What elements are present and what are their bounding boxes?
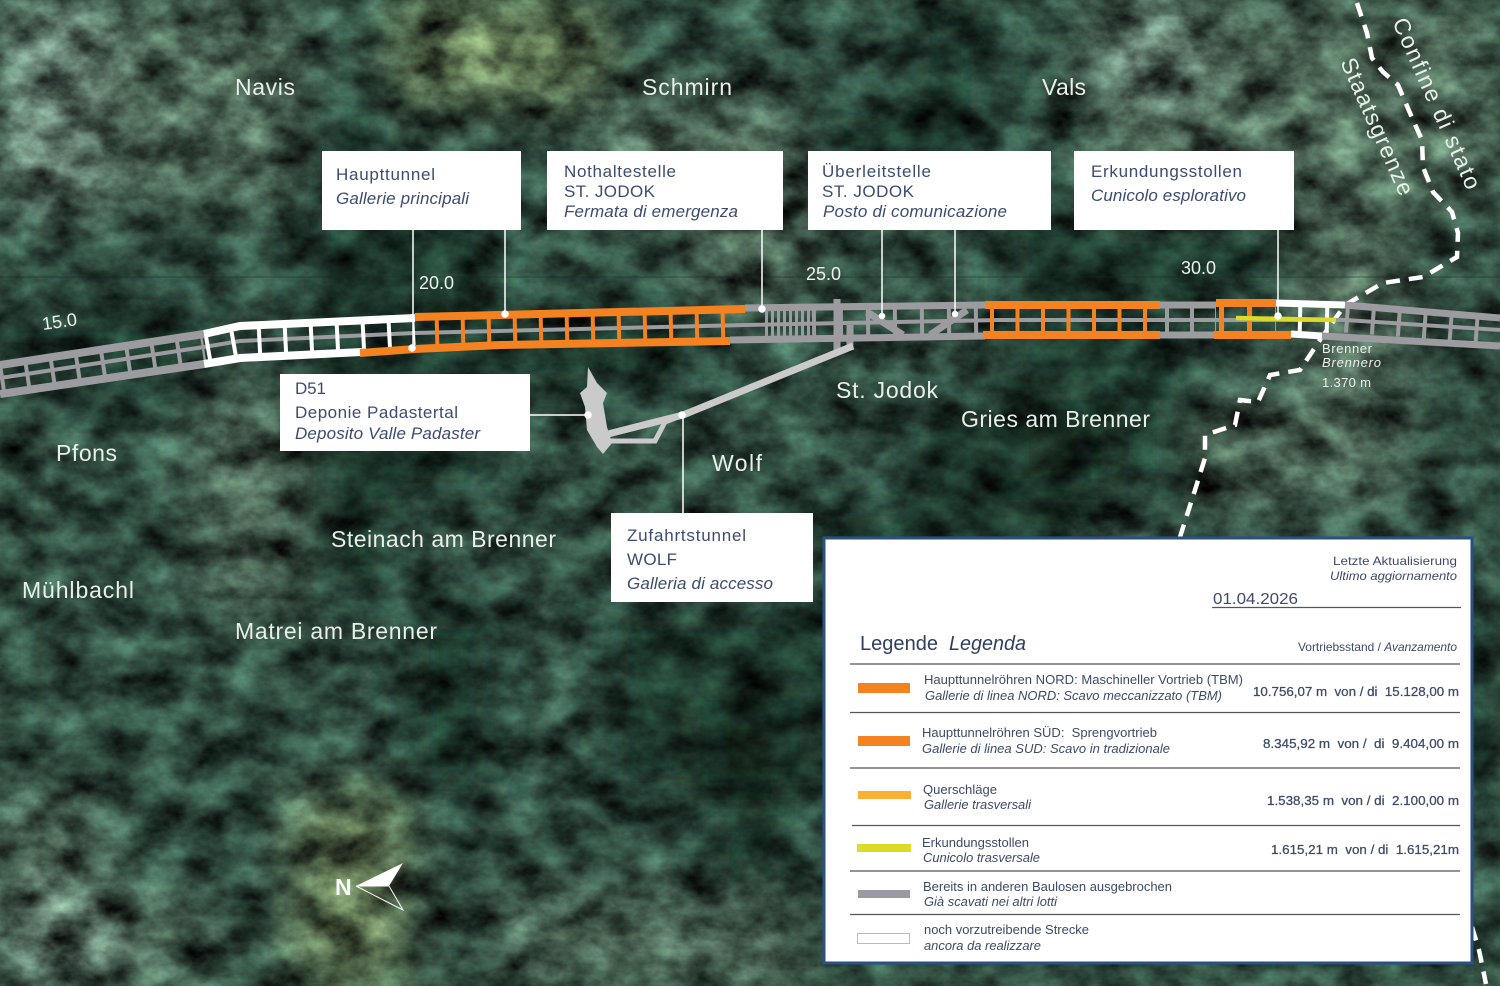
state border dashed line [1180, 3, 1486, 984]
kilometre labels [41, 258, 1216, 334]
place names: Wolf [712, 450, 763, 476]
callout: Zufahrtstunnel: Zufahrtstunnel [627, 526, 746, 545]
orange tubes east [1214, 303, 1291, 335]
tunnel alignment [0, 299, 1500, 394]
callout: D51: Deposito Valle Padaster [295, 424, 481, 443]
Brenner label: Brenner [1322, 341, 1373, 356]
grey tubes short [1160, 305, 1216, 335]
place names: Navis [235, 74, 295, 100]
legend row: already excavated: Bereits in anderen Baulosen ausgebrochen [923, 879, 1172, 894]
exploratory tunnel centre line [0, 320, 1500, 378]
legend row: already excavated: Già scavati nei altri lotti [924, 894, 1058, 909]
legend row: TBM north: Gallerie di linea NORD: Scavo meccanizzato (TBM) [925, 688, 1222, 703]
place names: Matrei am Brenner [235, 618, 437, 644]
cross passages grey west [0, 347, 204, 378]
legend row: exploratory tunnel: 1.615,21 m von / di 1.615,21m [1271, 842, 1459, 857]
kilometre labels: 25.0 [806, 264, 841, 284]
callout: Überleitstelle [808, 151, 1051, 230]
last update: Ultimo aggiornamento [1330, 569, 1457, 583]
legend row: TBM north: Haupttunnelröhren NORD: Maschineller Vortrieb (TBM) [924, 672, 1243, 687]
callout: Erkundungsstollen: Erkundungsstollen [1091, 162, 1242, 181]
cross passages white [206, 333, 415, 348]
cross passages orange main [435, 325, 745, 332]
legend row: cross passages: Gallerie trasversali [924, 797, 1032, 812]
callout: Überleitstelle: Posto di comunicazione [823, 202, 1007, 221]
callout: Erkundungsstollen: Cunicolo esplorativo [1091, 186, 1246, 205]
legend row: cross passages: 1.538,35 m von / di 2.100,00 m [1267, 793, 1459, 808]
orange tubes middle [983, 305, 1160, 335]
legend heading: Vortriebsstand / Avanzamento [1298, 640, 1457, 654]
legend row: already excavated [858, 879, 1172, 909]
legend row: still to excavate: ancora da realizzare [924, 938, 1041, 953]
legend row: exploratory tunnel: Erkundungsstollen [922, 835, 1029, 850]
place names: Pfons [56, 440, 117, 466]
grey tubes east [1322, 305, 1500, 346]
yellow exploratory tunnel [1236, 318, 1336, 320]
callout: Haupttunnel [322, 151, 521, 230]
last update: 01.04.2026 [1213, 591, 1298, 608]
legend row: blasting south: Gallerie di linea SUD: Scavo in tradizionale [922, 741, 1170, 756]
kilometre labels: 30.0 [1181, 258, 1216, 278]
border labels: Staatsgrenze [1335, 53, 1419, 199]
callout: Zufahrtstunnel [611, 513, 813, 602]
legend row: cross passages [858, 782, 1459, 812]
callout: Überleitstelle: Überleitstelle [822, 162, 931, 181]
orange tubes [360, 309, 745, 353]
border labels [1335, 13, 1486, 199]
place names [22, 74, 1150, 644]
place names: Gries am Brenner [961, 406, 1150, 432]
callout: Nothaltestelle [547, 151, 783, 230]
callout: D51: D51 [295, 379, 326, 398]
legend row: still to excavate: noch vorzutreibende Strecke [924, 922, 1089, 937]
place names: St. Jodok [836, 377, 938, 403]
place names: Steinach am Brenner [331, 526, 556, 552]
border labels: Confine di stato [1387, 13, 1486, 193]
callout: D51 [280, 374, 530, 451]
legend heading: Legenda [949, 633, 1026, 655]
legend row: blasting south: Haupttunnelröhren SÜD: Sprengvortrieb [922, 725, 1157, 740]
legend row: TBM north: 10.756,07 m von / di 15.128,00 m [1253, 684, 1459, 699]
callout: Haupttunnel: Gallerie principali [336, 189, 470, 208]
callout: Zufahrtstunnel: WOLF [627, 550, 677, 569]
callout: Überleitstelle: ST. JODOK [822, 182, 915, 201]
legend row: still to excavate [858, 922, 1089, 953]
callout: Nothaltestelle: ST. JODOK [564, 182, 656, 201]
kilometre labels: 15.0 [41, 309, 78, 334]
grey tubes centre [730, 305, 985, 340]
legend row: cross passages: Querschläge [923, 782, 997, 797]
callout: Haupttunnel: Haupttunnel [336, 165, 435, 184]
place names: Schmirn [642, 74, 732, 100]
north arrow: N [335, 874, 352, 900]
callout: Erkundungsstollen [1074, 151, 1294, 230]
legend row: blasting south [858, 725, 1459, 756]
legend row: exploratory tunnel [857, 835, 1459, 865]
panel: legend [824, 538, 1472, 963]
white tubes east [1276, 303, 1345, 336]
callout: Zufahrtstunnel: Galleria di accesso [627, 574, 773, 593]
legend row: TBM north [858, 672, 1459, 703]
Brenner label [1322, 341, 1381, 390]
Padaster deposit and access tunnel [580, 346, 853, 454]
legend row: blasting south: 8.345,92 m von / di 9.404,00 m [1263, 736, 1459, 751]
last update: Letzte Aktualisierung [1333, 554, 1457, 568]
cross passages orange middle [990, 305, 1160, 335]
Brenner label: Brennero [1322, 355, 1381, 370]
last update [1212, 554, 1461, 608]
place names: Vals [1042, 74, 1086, 100]
north arrow [335, 863, 403, 910]
callout: Nothaltestelle: Nothaltestelle [564, 162, 676, 181]
legend heading [860, 633, 1457, 655]
legend heading: Legende [860, 633, 938, 655]
grey tubes west [0, 334, 204, 394]
kilometre labels: 20.0 [419, 273, 454, 293]
legend row: exploratory tunnel: Cunicolo trasversale [923, 850, 1040, 865]
white tubes [204, 318, 415, 364]
place names: Mühlbachl [22, 577, 134, 603]
callout: Nothaltestelle: Fermata di emergenza [564, 202, 738, 221]
St. Jodok structures [837, 299, 967, 350]
callout: D51: Deponie Padastertal [295, 403, 458, 422]
leader lines [409, 230, 1281, 513]
Brenner label: 1.370 m [1322, 375, 1371, 390]
grey grid at St. Jodok [765, 308, 812, 338]
